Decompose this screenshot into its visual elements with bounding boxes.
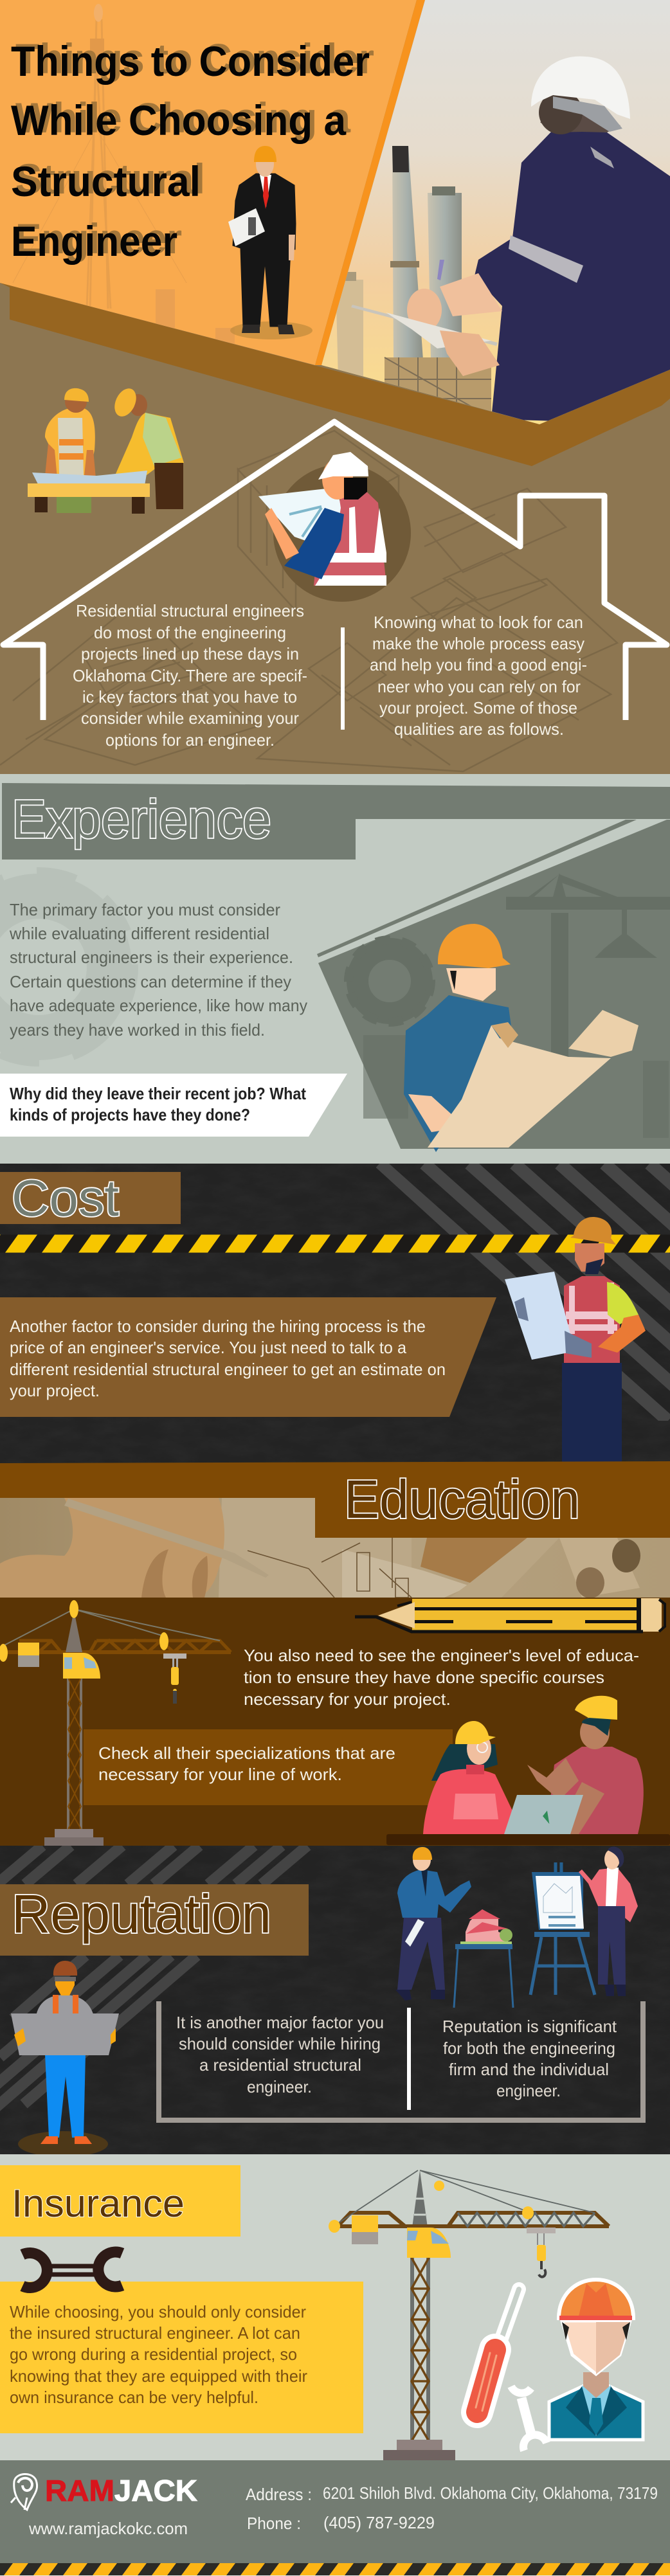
logo: RAMJACK wordmark: RAMJACK [45, 2474, 197, 2507]
sketch photo [0, 1498, 670, 1598]
panel: experience [0, 783, 670, 1152]
text: education paragraph: necessary for your project. [244, 1689, 451, 1709]
callout: specializations [84, 1729, 453, 1805]
icon: crane silhouette and gear [349, 873, 670, 1138]
text: house right paragraph: qualities are as follows. [394, 719, 564, 739]
text: house left paragraph: ic key factors that you have to [82, 687, 297, 707]
cost text box: different residential structural engineer to get an estimate on [10, 1360, 446, 1379]
icon: pencil [355, 1598, 665, 1632]
cost heading box [0, 1172, 181, 1224]
text: house left paragraph [73, 601, 307, 750]
text: phone [247, 2513, 435, 2533]
education heading band [0, 1461, 670, 1538]
text: house right paragraph [370, 613, 587, 739]
icon: large tower crane [329, 2170, 609, 2461]
text: education paragraph: You also need to see the engineer's level of educa- [244, 1646, 639, 1665]
text: education heading: Education [344, 1469, 580, 1529]
icon: white spanner [511, 2386, 547, 2451]
right slanted panel [318, 820, 670, 1149]
text: education paragraph: tion to ensure they have done specific courses [244, 1668, 604, 1687]
text: reputation left paragraph: should consider while hiring [179, 2034, 381, 2053]
panel: education [0, 1461, 670, 1846]
panel: footer [0, 2460, 670, 2576]
icon: presenters with house model and easel [395, 1847, 638, 2008]
insurance heading box [0, 2165, 240, 2237]
text: experience body: structural engineers is their experience. [10, 948, 293, 967]
text: address: Address : [246, 2485, 312, 2504]
text: reputation left paragraph: engineer. [247, 2077, 312, 2096]
hazard tape footer [0, 2563, 670, 2575]
text: education paragraph [244, 1646, 639, 1709]
text: experience body: The primary factor you must consider [10, 900, 280, 919]
callout: questions: Why did they leave their recent job? What [10, 1084, 306, 1103]
text: reputation right paragraph: engineer. [496, 2081, 561, 2100]
bracket frame [159, 2001, 643, 2120]
text: insurance body: the insured structural engineer. A lot can [10, 2323, 300, 2343]
text: website: www.ramjackokc.com [28, 2519, 188, 2538]
icon: two engineers at laptop [386, 1696, 670, 1845]
icon: engineer in black suit [228, 146, 312, 339]
title: Engineer [11, 217, 177, 265]
engineer from behind [351, 57, 670, 424]
text: house right paragraph: neer who you can rely on for [377, 677, 581, 696]
title [11, 37, 370, 265]
background: dark cost section [0, 1164, 670, 1464]
text: reputation left paragraph: It is another major factor you [176, 2013, 384, 2032]
icon: two workers at table [28, 385, 184, 514]
text: house right paragraph: Knowing what to look for can [374, 613, 583, 632]
refinery chimneys [336, 146, 491, 431]
icon: wrench [23, 2252, 122, 2287]
blueprint linework background [0, 431, 617, 771]
icon: worker with blueprint [404, 924, 638, 1152]
education body background [0, 1598, 670, 1846]
text: reputation right paragraph: for both the engineering [443, 2039, 615, 2058]
icon: worker with blueprint front view [11, 1961, 119, 2157]
icon: ram head logo [11, 2474, 37, 2510]
text: reputation heading: Reputation [12, 1884, 271, 1944]
panel: reputation [0, 1846, 643, 2157]
text: house left paragraph: options for an engineer. [105, 730, 275, 750]
title: Things to Consider [11, 37, 370, 85]
experience heading band [2, 783, 670, 860]
text: experience heading: Experience [12, 789, 271, 849]
text: reputation left paragraph: a residential structural [199, 2055, 361, 2075]
title: While Choosing a [11, 96, 347, 144]
text: house left paragraph: consider while examining your [81, 708, 299, 728]
panel: orange title panel [0, 0, 425, 365]
text: insurance heading: Insurance [12, 2182, 185, 2225]
text: house right paragraph: and help you find a good engi- [370, 655, 587, 674]
icon: screwdriver [476, 2289, 519, 2412]
icon: central engineer with plan [258, 452, 411, 602]
panel: cost [0, 1164, 670, 1466]
panel: insurance [0, 2154, 670, 2461]
panel: refinery photo with engineer [315, 0, 670, 431]
text: reputation right paragraph: firm and the individual [449, 2060, 609, 2079]
cost text box: price of an engineer's service. You just need to talk to a [10, 1338, 407, 1357]
text: house left paragraph: do most of the engineering [94, 623, 286, 642]
cost text box [0, 1297, 496, 1417]
hazard tape [0, 1234, 670, 1252]
header brown band [0, 283, 670, 466]
text: reputation right paragraph: Reputation is significant [442, 2017, 617, 2036]
text: reputation right paragraph [442, 2017, 617, 2100]
text: experience body: while evaluating different residential [9, 924, 269, 943]
background: dark reputation section [0, 1845, 670, 2155]
text: experience body: years they have worked in this field. [10, 1020, 265, 1040]
icon: worker reading plan [505, 1217, 646, 1466]
text: house left paragraph: Oklahoma City. There are specif- [73, 666, 307, 685]
background: tan header section [0, 0, 670, 775]
callout: questions [0, 1074, 347, 1137]
callout: specializations: Check all their specializations that are [98, 1743, 395, 1763]
text: house left paragraph: Residential structural engineers [76, 601, 304, 620]
cost text box: your project. [10, 1381, 100, 1400]
icon: faint gear [0, 876, 130, 1058]
callout: specializations: necessary for your line of work. [98, 1765, 342, 1784]
text: house left paragraph: projects lined up these days in [81, 644, 299, 663]
text: insurance body: knowing that they are equipped with their [10, 2366, 307, 2386]
cost text box: Another factor to consider during the hiring process is the [10, 1317, 426, 1336]
icon: tower crane [0, 1600, 231, 1846]
text: insurance body: While choosing, you should only consider [10, 2302, 306, 2321]
callout: questions: kinds of projects have they done? [10, 1105, 250, 1124]
text: reputation left paragraph [176, 2013, 384, 2096]
background: sage experience section [0, 774, 670, 1164]
reputation heading box [0, 1884, 309, 1956]
text: phone: (405) 787-9229 [323, 2513, 435, 2532]
text: phone: Phone : [247, 2514, 301, 2533]
text: experience body: Certain questions can determine if they [10, 972, 291, 991]
icon: engineer bust [549, 2280, 643, 2440]
text: house right paragraph: make the whole process easy [372, 634, 584, 653]
text: insurance body: go wrong during a residential project, so [10, 2345, 297, 2364]
text: insurance body [10, 2302, 307, 2407]
text: experience body [9, 900, 307, 1040]
text: insurance body: own insurance can be very helpful. [10, 2388, 258, 2407]
text: house right paragraph: your project. Some of those [379, 698, 577, 717]
insurance body box [0, 2282, 363, 2433]
text: cost heading: Cost [12, 1169, 119, 1227]
icon: house outline [3, 422, 667, 720]
text: experience body: have adequate experience, like how many [10, 996, 307, 1015]
title: Structural [11, 158, 201, 205]
